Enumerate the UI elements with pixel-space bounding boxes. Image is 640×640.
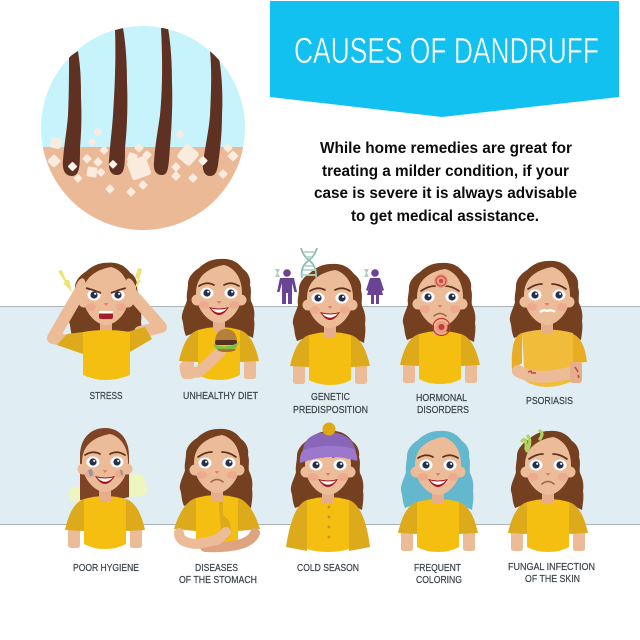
- arm holding burger: [185, 352, 220, 373]
- flakes behind hair: [47, 128, 239, 197]
- label: [416, 393, 469, 416]
- label: UNHEALTHY DIET: [183, 391, 258, 402]
- label: [508, 562, 595, 585]
- label: COLD SEASON: [297, 563, 359, 574]
- icon: forehead spot: [434, 274, 448, 288]
- figure: psoriasis: [510, 261, 587, 407]
- figure: hormonal disorders: [400, 263, 480, 416]
- label: FREQUENT: [414, 563, 461, 574]
- illustration: hair follicles and dandruff flakes: [40, 20, 250, 237]
- label: DISEASES: [195, 563, 238, 574]
- icon: neck target: [433, 318, 450, 336]
- icon: small chromosomes: [275, 269, 369, 277]
- label: POOR HYGIENE: [73, 563, 139, 574]
- label: OF THE SKIN: [525, 574, 580, 585]
- stomach shape: [217, 499, 231, 541]
- icon: man: [277, 269, 297, 304]
- icon: odor clouds: [68, 474, 148, 502]
- label: PSORIASIS: [526, 396, 573, 407]
- intro text: [314, 140, 577, 225]
- icon: dna helix: [301, 248, 317, 278]
- title banner: [270, 1, 619, 117]
- figure: stress: [53, 263, 161, 402]
- label: [179, 563, 257, 586]
- icon: burger: [213, 329, 239, 352]
- label: STRESS: [90, 391, 123, 402]
- label: OF THE STOMACH: [179, 575, 257, 586]
- lightning bolts: [58, 268, 142, 292]
- figure: unhealthy diet: [179, 259, 259, 402]
- flakes over hair and skin: [68, 156, 208, 171]
- intro text: case is severe it is always advisable: [314, 185, 577, 202]
- intro text: While home remedies are great for: [320, 140, 572, 157]
- figure: frequent coloring: [398, 431, 478, 586]
- label: COLORING: [416, 575, 462, 586]
- arms raised: [53, 293, 161, 341]
- arms across body: [205, 533, 255, 547]
- background band: [0, 306, 640, 525]
- intro text: to get medical assistance.: [351, 208, 539, 225]
- figure: cold season: [286, 422, 370, 574]
- icon: fungus spores: [522, 431, 542, 451]
- label: DISORDERS: [417, 405, 469, 416]
- intro text: treating a milder condition, if your: [322, 163, 569, 180]
- label: HORMONAL: [416, 393, 467, 404]
- icon: winter hat: [300, 422, 357, 463]
- icon: woman: [366, 269, 384, 304]
- label: [293, 392, 368, 416]
- figure: poor hygiene: [65, 428, 148, 574]
- label: FUNGAL INFECTION: [508, 562, 595, 573]
- label: PREDISPOSITION: [293, 405, 368, 416]
- folded arm: [518, 371, 573, 377]
- label: [414, 563, 462, 586]
- figure: genetic predisposition: [275, 248, 384, 416]
- figure: diseases of the stomach: [174, 429, 260, 586]
- figure: fungal infection of the skin: [508, 431, 595, 585]
- label: GENETIC: [311, 392, 350, 403]
